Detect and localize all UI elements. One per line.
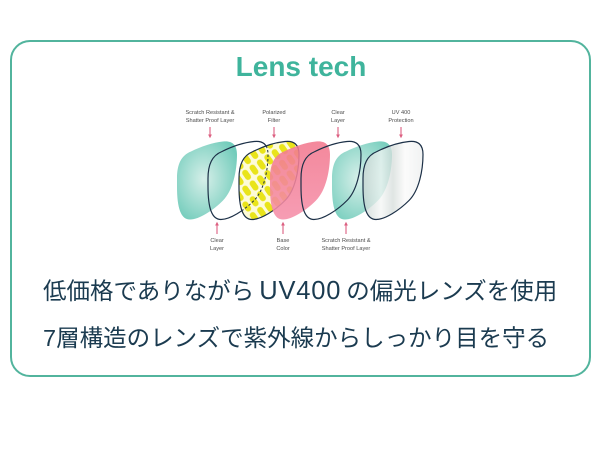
title: Lens tech: [236, 51, 366, 82]
lens layers diagram: [177, 110, 424, 251]
bottom arrows: [216, 223, 347, 234]
label: clear layer top: Clear: [331, 110, 345, 116]
label: polarized filter: Polarized: [262, 110, 286, 116]
label: polarized filter: Filter: [268, 118, 280, 124]
clear layer dashed edge over filter: [242, 146, 268, 211]
label: scratch resistant top: Scratch Resistant &: [185, 110, 235, 116]
lens: scratch resistant layer 2: [332, 141, 392, 220]
text: line 2: 7層構造のレンズで紫外線からしっかり目を守る: [43, 325, 549, 351]
label: UV 400 protection: Protection: [388, 118, 414, 124]
label: UV 400 protection: UV 400: [392, 110, 410, 116]
lens: clear layer 1: [208, 141, 268, 220]
label: base color: Color: [276, 246, 290, 252]
lens: clear layer 2: [301, 141, 361, 220]
label: base color: Base: [277, 238, 289, 244]
lens: scratch resistant layer 1: [177, 141, 237, 220]
text: line 1: 低価格でありながらUV400の偏光レンズを使用: [43, 277, 557, 305]
clear layer edge over teal: [334, 146, 362, 212]
panel: lens tech card: [10, 40, 590, 376]
label: scratch resistant top: Shatter Proof Layer: [186, 118, 234, 124]
lens: UV 400 protection: [363, 141, 423, 220]
label: scratch resistant bottom: Scratch Resistant &: [321, 238, 371, 244]
label: clear layer top: Layer: [331, 118, 345, 124]
lens: polarized filter: [239, 141, 299, 220]
label: clear layer bottom: Layer: [210, 246, 224, 252]
label: clear layer bottom: Clear: [210, 238, 224, 244]
lens: base color: [270, 141, 330, 220]
top arrows: [209, 127, 402, 137]
label: scratch resistant bottom: Shatter Proof Layer: [322, 246, 370, 252]
